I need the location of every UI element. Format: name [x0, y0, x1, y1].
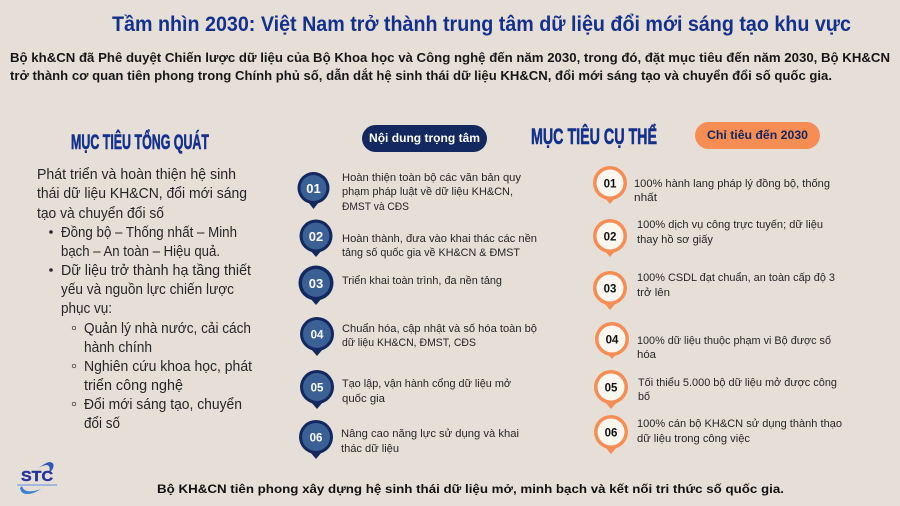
item 06: [299, 420, 519, 459]
panel: general objectives text: Dữ liệu trở thành hạ tầng thiết: [61, 263, 251, 279]
target 05: bố: [638, 391, 650, 403]
item 02: Hoàn thành, đưa vào khai thác các nền: [342, 233, 537, 245]
target 04: [595, 322, 831, 361]
target 03: 100% CSDL đạt chuẩn, an toàn cấp độ 3: [637, 272, 835, 284]
panel: general objectives text: Quản lý nhà nước, cải cách: [84, 321, 251, 337]
heading: general objectives: MỤC TIÊU TỔNG QUÁT: [71, 130, 209, 154]
item 06: thác dữ liệu: [341, 443, 399, 455]
item 03: Triển khai toàn trình, đa nền tảng: [342, 275, 502, 287]
item 05: [300, 370, 511, 409]
panel: general objectives text: thái dữ liệu KH&CN, đổi mới sáng: [37, 186, 247, 202]
footer statement: Bộ KH&CN tiên phong xây dựng hệ sinh thái dữ liệu mở, minh bạch và kết nối tri thức số quốc gia.: [157, 484, 784, 496]
item 01: ĐMST và CĐS: [342, 201, 409, 213]
target 02: thay hồ sơ giấy: [637, 234, 714, 246]
panel: general objectives text: Đồng bộ – Thống nhất – Minh: [61, 225, 237, 241]
list: 2030 targets: [593, 166, 842, 454]
target 05: 05: [605, 382, 618, 394]
target 02: 02: [604, 232, 616, 244]
panel: general objectives text: [37, 167, 252, 432]
target 06: 100% cán bộ KH&CN sử dụng thành thạo: [637, 418, 842, 430]
target 05: [594, 370, 837, 409]
target 03: trở lên: [637, 287, 670, 299]
pill: key content: [362, 125, 487, 152]
intro text: [10, 50, 890, 83]
target 06: dữ liệu trong công việc: [637, 433, 751, 445]
target 01: [593, 166, 830, 204]
logo: STC: STC: [21, 469, 54, 485]
item 01: 01: [306, 181, 321, 196]
item 02: 02: [309, 229, 323, 244]
pill: 2030 targets: Chỉ tiêu đến 2030: [707, 130, 808, 142]
pill: 2030 targets: [695, 122, 820, 149]
item 05: quốc gia: [342, 393, 385, 405]
item 05: 05: [311, 382, 324, 394]
item 06: Nâng cao năng lực sử dụng và khai: [341, 428, 519, 440]
pill: key content: Nội dung trọng tâm: [369, 133, 480, 145]
panel: general objectives text: Phát triển và hoàn thiện hệ sinh: [37, 167, 236, 183]
panel: general objectives text: triển công nghệ: [84, 378, 183, 394]
intro text: Bộ kh&CN đã Phê duyệt Chiến lược dữ liệu của Bộ Khoa học và Công nghệ đến năm 2030, trong đó, đặt mục tiêu đến năm 2030, Bộ KH&CN: [10, 50, 890, 65]
panel: general objectives text: đổi số: [84, 416, 120, 432]
item 04: 04: [311, 330, 324, 342]
item 06: 06: [310, 432, 322, 444]
target 02: 100% dịch vụ công trực tuyến; dữ liệu: [637, 219, 823, 231]
item 02: tảng số quốc gia về KH&CN & ĐMST: [342, 247, 520, 259]
item 04: Chuẩn hóa, cập nhật và số hóa toàn bộ: [342, 323, 537, 335]
target 03: [593, 271, 835, 310]
item 04: dữ liệu KH&CN, ĐMST, CĐS: [342, 337, 476, 349]
item 01: Hoàn thiện toàn bộ các văn bản quy: [342, 172, 522, 184]
panel: general objectives text: bạch – An toàn – Hiệu quả.: [61, 244, 220, 260]
panel: general objectives text: tạo và chuyển đổi số: [37, 206, 164, 222]
target 04: 100% dữ liệu thuộc phạm vi Bộ được số: [637, 335, 831, 347]
heading: specific objectives: MỤC TIÊU CỤ THỂ: [531, 124, 657, 149]
target 01: 01: [604, 178, 617, 190]
panel: general objectives text: yếu và nguồn lực chiến lược: [61, 282, 234, 298]
item 01: phạm pháp luật về dữ liệu KH&CN,: [342, 186, 513, 198]
item 03: [298, 266, 502, 305]
item 04: [300, 317, 537, 356]
item 02: [300, 220, 537, 259]
logo: STC: [17, 462, 57, 494]
list: key content: [298, 172, 537, 459]
target 05: Tối thiểu 5.000 bộ dữ liệu mở được công: [638, 377, 837, 389]
item 03: 03: [309, 276, 323, 291]
target 04: 04: [606, 334, 619, 346]
target 06: [594, 415, 842, 454]
target 04: hóa: [637, 349, 656, 361]
target 01: nhất: [634, 192, 657, 204]
panel: general objectives text: Nghiên cứu khoa học, phát: [84, 359, 252, 375]
target 03: 03: [604, 284, 616, 296]
panel: general objectives text: hành chính: [84, 340, 152, 356]
target 02: [593, 219, 823, 257]
panel: general objectives text: Đổi mới sáng tạo, chuyển: [84, 397, 242, 413]
target 06: 06: [605, 428, 617, 440]
intro text: trở thành cơ quan tiên phong trong Chính phủ số, dẫn dắt hệ sinh thái dữ liệu KH&CN, đổi mới sáng tạo và chuyển đổi số quốc gia.: [10, 68, 832, 83]
panel: general objectives text: phục vụ:: [61, 301, 112, 317]
item 01: [298, 172, 522, 213]
target 01: 100% hành lang pháp lý đồng bộ, thống: [634, 178, 830, 190]
item 05: Tạo lập, vận hành cổng dữ liệu mở: [342, 378, 511, 390]
title: Tầm nhìn 2030: Việt Nam trở thành trung tâm dữ liệu đổi mới sáng tạo khu vực: [112, 13, 851, 36]
